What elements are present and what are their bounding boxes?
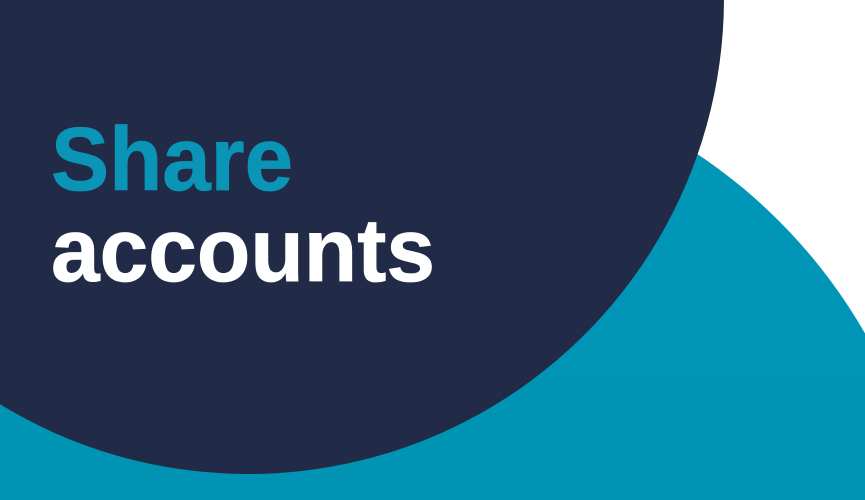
- title word: accounts: accounts: [51, 201, 435, 301]
- title word: Share: Share: [51, 110, 293, 210]
- title: [51, 110, 435, 301]
- navy foreground circle: [0, 0, 724, 474]
